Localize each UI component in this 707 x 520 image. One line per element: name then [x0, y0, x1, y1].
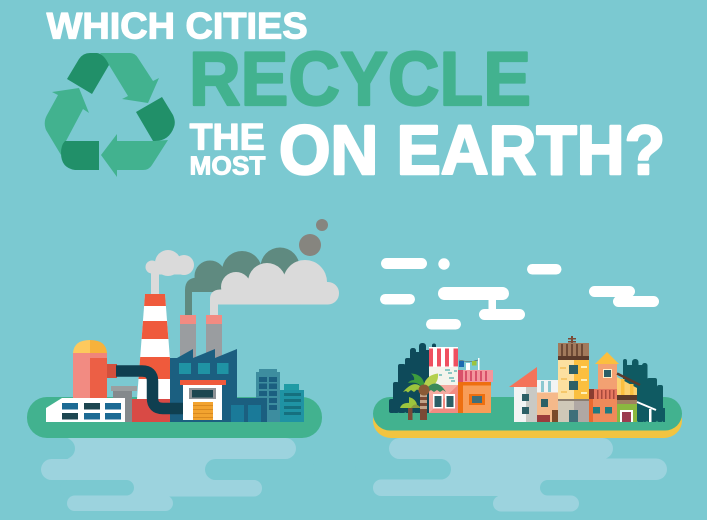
- title: [47, 6, 665, 189]
- teal building: [280, 384, 304, 422]
- heading: the: THE: [190, 116, 265, 158]
- white sky clouds: [380, 258, 659, 330]
- tower block: [256, 369, 280, 422]
- small palm: [400, 397, 421, 420]
- gray annex: [111, 386, 137, 422]
- house: orange with balcony: [458, 370, 493, 413]
- trees: left village: [389, 343, 436, 413]
- house: pink with awning: [429, 347, 458, 413]
- island: right: [373, 397, 682, 438]
- striped chimney: [137, 294, 173, 399]
- house: small peach: [537, 380, 558, 422]
- palm tree: [403, 374, 446, 420]
- heading: recycle: RECYCLE: [189, 37, 531, 122]
- silo: [73, 340, 107, 398]
- laundry line: [459, 358, 480, 370]
- factory stacks: [180, 315, 222, 360]
- dark smoke cloud: [185, 248, 300, 316]
- water reflection: right: [355, 438, 667, 512]
- heading: most: MOST: [190, 150, 266, 180]
- trees: right village: [623, 359, 665, 422]
- island: left: [27, 397, 322, 438]
- house: orange tower: [589, 352, 619, 422]
- tower house: [558, 336, 589, 422]
- light smoke cloud: [210, 260, 339, 316]
- icon: recycling symbol: [45, 53, 175, 177]
- red base: [132, 399, 178, 422]
- smoke balls: [299, 219, 328, 256]
- connector and pipe: [107, 364, 183, 408]
- white canopy: [637, 402, 656, 422]
- house: white with red roof: [509, 367, 537, 422]
- heading: on earth: ON EARTH?: [279, 111, 665, 189]
- small steam cloud: [146, 250, 194, 295]
- house: yellow striped: [617, 374, 640, 422]
- heading: which cities: WHICH CITIES: [47, 6, 308, 46]
- water reflection: left: [20, 438, 315, 511]
- white building: [46, 398, 125, 422]
- factory building: [170, 349, 267, 422]
